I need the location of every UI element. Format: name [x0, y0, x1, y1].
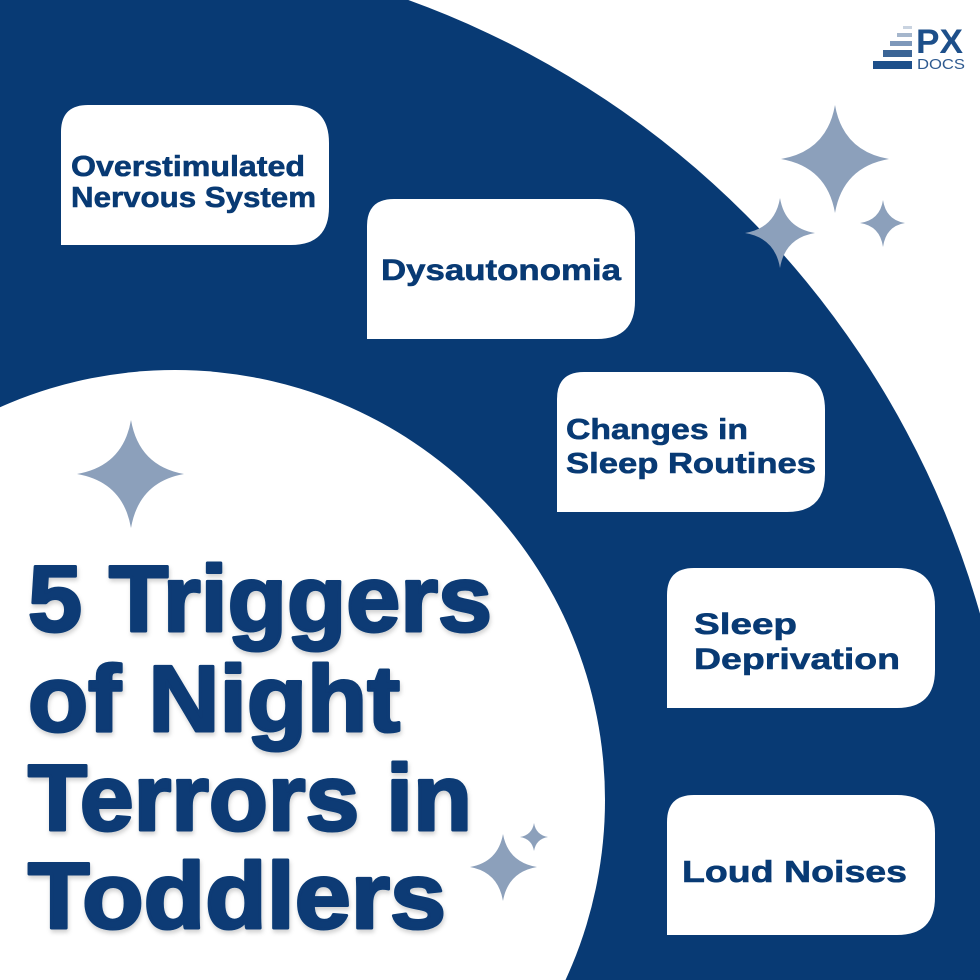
- box: Changes in Sleep Routines: Changes in: [566, 414, 748, 446]
- box: Overstimulated Nervous System: [61, 105, 329, 245]
- icon: sparkles bottom: [470, 823, 548, 901]
- logo: PX DOCS: [873, 23, 965, 73]
- icon: sparkle cluster top right: [745, 105, 905, 268]
- title: of Night: [28, 646, 400, 751]
- box: Sleep Deprivation: [667, 568, 935, 708]
- box: Changes in Sleep Routines: [557, 372, 825, 512]
- title: 5 Triggers: [28, 546, 492, 651]
- title: Toddlers: [28, 843, 446, 948]
- box: Overstimulated Nervous System: Nervous System: [71, 182, 316, 214]
- box: Dysautonomia: [367, 199, 635, 339]
- box: Overstimulated Nervous System: Overstimulated: [71, 151, 305, 183]
- title: Terrors in: [28, 745, 472, 850]
- icon: sparkle near title: [77, 420, 184, 528]
- box: Sleep Deprivation: Sleep: [694, 608, 797, 641]
- title: [28, 546, 492, 948]
- logo: PX DOCS: PX: [916, 23, 963, 61]
- box: Changes in Sleep Routines: Sleep Routines: [566, 448, 816, 480]
- box: Dysautonomia: Dysautonomia: [381, 254, 621, 287]
- box: Loud Noises: Loud Noises: [682, 854, 907, 889]
- logo: PX DOCS: DOCS: [917, 56, 965, 73]
- box: Loud Noises: [667, 795, 935, 935]
- white title circle: [0, 370, 605, 980]
- box: Sleep Deprivation: Deprivation: [694, 643, 900, 676]
